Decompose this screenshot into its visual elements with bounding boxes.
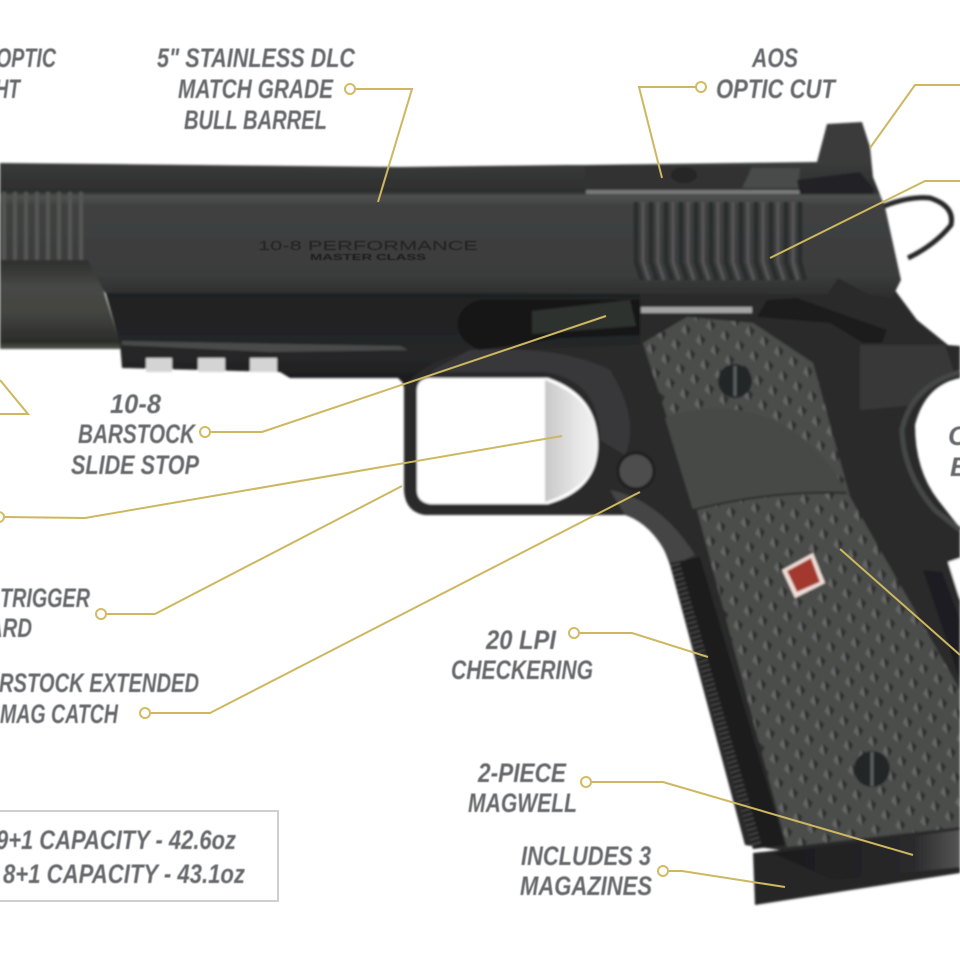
optic wedge bbox=[742, 168, 800, 188]
grip screw bottom bbox=[854, 751, 890, 787]
label: checkering: CHECKERING bbox=[451, 655, 593, 685]
label: barrel: MATCH GRADE bbox=[178, 74, 334, 104]
slide stop bbox=[458, 300, 640, 350]
label: magwell: MAGWELL bbox=[468, 788, 577, 818]
mag catch button bbox=[618, 453, 654, 489]
label: barrel: BULL BARREL bbox=[184, 105, 327, 135]
white trigger guard opening bbox=[417, 378, 598, 504]
label: mag catch: MAG CATCH bbox=[0, 699, 118, 729]
dot: magwell bbox=[581, 777, 591, 787]
thumb safety bbox=[757, 298, 887, 343]
dot: slide stop bbox=[200, 427, 210, 437]
label: mag catch bbox=[0, 668, 199, 729]
capacity text: 9+1 CAPACITY - 42.6oz bbox=[0, 825, 236, 855]
red medallion bbox=[782, 553, 825, 598]
dot: trigger bbox=[0, 512, 4, 522]
box outline bbox=[0, 811, 278, 901]
screw slots bbox=[735, 366, 872, 786]
white gap beside mainspring bbox=[948, 558, 960, 600]
dot: checkering bbox=[569, 628, 579, 638]
leader: optic sight bbox=[0, 380, 28, 414]
label: magazines: INCLUDES 3 bbox=[521, 841, 651, 871]
leader: optic cut bbox=[639, 87, 696, 178]
guide rod glint bbox=[641, 307, 752, 313]
thumb rest bbox=[665, 408, 847, 510]
label: slide stop: SLIDE STOP bbox=[71, 450, 200, 480]
capacity text: 8+1 CAPACITY - 43.1oz bbox=[3, 859, 245, 889]
label: right edge bbox=[948, 421, 960, 482]
label: magazines: MAGAZINES bbox=[520, 871, 652, 901]
rail highlight bbox=[122, 341, 408, 352]
label: magwell bbox=[468, 758, 577, 818]
label: slide stop bbox=[71, 389, 200, 480]
leader: slide stop bbox=[210, 316, 606, 432]
grip screw top bbox=[718, 364, 752, 398]
label: magwell: 2-PIECE bbox=[477, 758, 567, 788]
leader: rear sight bbox=[870, 85, 960, 148]
frame highlight at trigger guard bbox=[430, 349, 630, 455]
beavertail highlight bbox=[860, 345, 955, 410]
label: optic cut: AOS bbox=[751, 43, 798, 73]
mag catch ring bbox=[618, 453, 654, 489]
barrel and bushing bbox=[0, 260, 122, 349]
label: barrel: 5" STAINLESS DLC bbox=[157, 43, 355, 73]
marking line one: 10-8 PERFORMANCE bbox=[258, 238, 479, 253]
label: optic cut: OPTIC CUT bbox=[716, 74, 837, 104]
grip panel bbox=[643, 317, 960, 847]
magwell base bbox=[753, 830, 960, 905]
rear sight shade bbox=[797, 172, 873, 194]
optic cover plate bbox=[585, 166, 750, 189]
leader: checkering bbox=[579, 633, 708, 657]
leader: grip panel bbox=[840, 549, 960, 655]
frontstrap serrations bbox=[670, 557, 785, 849]
dot: mag catch bbox=[140, 708, 150, 718]
label: optic cut bbox=[716, 43, 837, 104]
optic cover edge bbox=[586, 190, 852, 194]
slide stop lever bbox=[532, 300, 636, 334]
label: trigger guard bbox=[0, 583, 90, 643]
leader: trigger bbox=[4, 436, 562, 518]
label: mag catch: RSTOCK EXTENDED bbox=[0, 668, 199, 698]
frame highlight below mag catch bbox=[610, 490, 695, 566]
mainspring serrations bbox=[923, 570, 960, 680]
leader: rear serrations bbox=[770, 181, 960, 258]
label: trigger guard: TRIGGER bbox=[0, 583, 90, 613]
leader: trigger guard bbox=[106, 486, 402, 614]
grip safety ring bbox=[902, 372, 960, 530]
optic screw bbox=[671, 167, 697, 183]
leader: mag catch bbox=[150, 492, 640, 713]
dot: trigger guard bbox=[96, 609, 106, 619]
label: slide stop: 10-8 bbox=[110, 389, 161, 419]
lanyard loop bbox=[884, 198, 952, 258]
label: checkering: 20 LPI bbox=[485, 625, 556, 655]
label: checkering bbox=[451, 625, 593, 685]
magwell top bbox=[772, 830, 960, 880]
capacity text bbox=[0, 825, 245, 889]
rear serrations bbox=[636, 202, 805, 280]
front serrations bbox=[2, 192, 83, 260]
rail notches bbox=[146, 358, 277, 372]
engraved slide marking bbox=[258, 238, 479, 262]
label: barrel bbox=[157, 43, 355, 135]
slide bbox=[0, 122, 901, 298]
dot: magazines bbox=[658, 866, 668, 876]
leader: magazines bbox=[668, 871, 785, 887]
leader: magwell bbox=[591, 782, 913, 855]
capacity box bbox=[0, 811, 278, 901]
frame body and grip backing bbox=[400, 270, 960, 850]
marking line two: MASTER CLASS bbox=[310, 253, 427, 262]
thumb rest edge bbox=[693, 493, 847, 510]
label: slide stop: BARSTOCK bbox=[78, 419, 197, 449]
label: magazines bbox=[520, 841, 652, 901]
dot: optic cut bbox=[696, 82, 706, 92]
dot: barrel bbox=[345, 84, 355, 94]
label: optic sight bbox=[0, 43, 56, 104]
leader: barrel bbox=[355, 89, 412, 202]
dust cover with rail bbox=[105, 291, 640, 385]
trigger bbox=[545, 380, 598, 502]
